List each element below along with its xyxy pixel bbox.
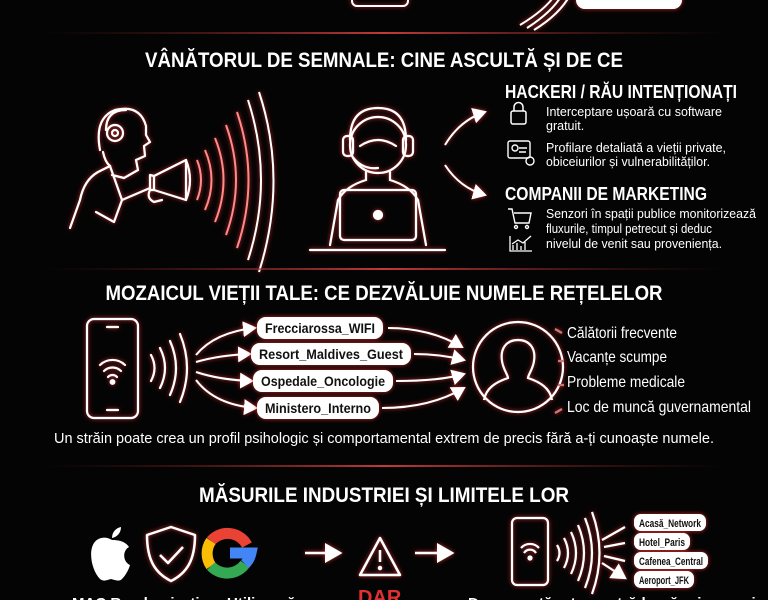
inferred traits: Probleme medicale <box>567 374 685 391</box>
icon: shield <box>147 527 195 581</box>
panel: hackers: Profilare detaliată a vieții private, <box>546 141 726 155</box>
inferred traits <box>567 325 751 416</box>
arrows with warning <box>305 538 452 575</box>
icon: phone broadcasting <box>512 512 625 594</box>
panel: marketing: COMPANII DE MARKETING <box>505 184 707 204</box>
inferred traits: Călătorii frecvente <box>567 325 677 342</box>
footnote: Un străin poate crea un profil psihologic și comportamental extrem de precis fără a-ți cunoaște numele. <box>54 431 714 447</box>
inferred traits: Vacanțe scumpe <box>567 349 667 366</box>
title: signal hunter: VÂNĂTORUL DE SEMNALE: CINE ASCULTĂ ȘI DE CE <box>145 48 623 72</box>
panel: hackers: Interceptare ușoară cu software <box>546 105 722 119</box>
icon: chart <box>510 236 532 251</box>
text: Resort_Maldives_Guest <box>259 346 403 362</box>
panel: marketing: Senzori în spații publice monitorizează <box>546 207 756 221</box>
text: Hotel_Paris <box>639 537 685 549</box>
icon: signal waves <box>197 92 274 272</box>
illustration: person with megaphone <box>70 109 190 228</box>
icon: lock <box>511 102 526 124</box>
title: mosaic: MOZAICUL VIEȚII TALE: CE DEZVĂLUIE NUMELE REȚELELOR <box>106 282 662 305</box>
panel: hackers <box>505 81 737 169</box>
title: industry measures: MĂSURILE INDUSTRIEI ȘI LIMITELE LOR <box>199 484 569 507</box>
panel: marketing: fluxurile, timpul petrecut și deduc <box>546 222 712 236</box>
top remnant: previous section <box>352 0 681 30</box>
arrow <box>284 158 322 160</box>
panel: hackers: obiceiurilor și vulnerabilităților. <box>546 155 710 169</box>
network name pills <box>251 317 411 419</box>
icon: apple <box>91 527 130 581</box>
panel: marketing: nivelul de venit sau proveniența. <box>546 237 722 251</box>
arrows to network names <box>196 328 464 408</box>
icon: cart <box>508 209 531 228</box>
text: Acasă_Network <box>639 518 702 530</box>
panel: hackers: HACKERI / RĂU INTENȚIONAȚI <box>505 81 737 102</box>
illustration: listener with laptop <box>310 108 445 250</box>
panel: hackers: gratuit. <box>546 119 584 133</box>
icon: profile card <box>508 141 534 165</box>
icon: person profile <box>473 322 564 413</box>
arrows to threats <box>445 112 485 195</box>
text: Cafenea_Central <box>639 556 703 568</box>
text: Ospedale_Oncologie <box>261 373 385 389</box>
text: Ministero_Interno <box>265 400 371 416</box>
text: Frecciarossa_WIFI <box>265 320 375 336</box>
text: Aeroport_JFK <box>639 575 689 587</box>
broadcast network pills <box>634 514 708 588</box>
panel: marketing <box>505 184 756 251</box>
icon: phone with wifi <box>87 319 187 418</box>
icon: google G <box>207 533 251 573</box>
